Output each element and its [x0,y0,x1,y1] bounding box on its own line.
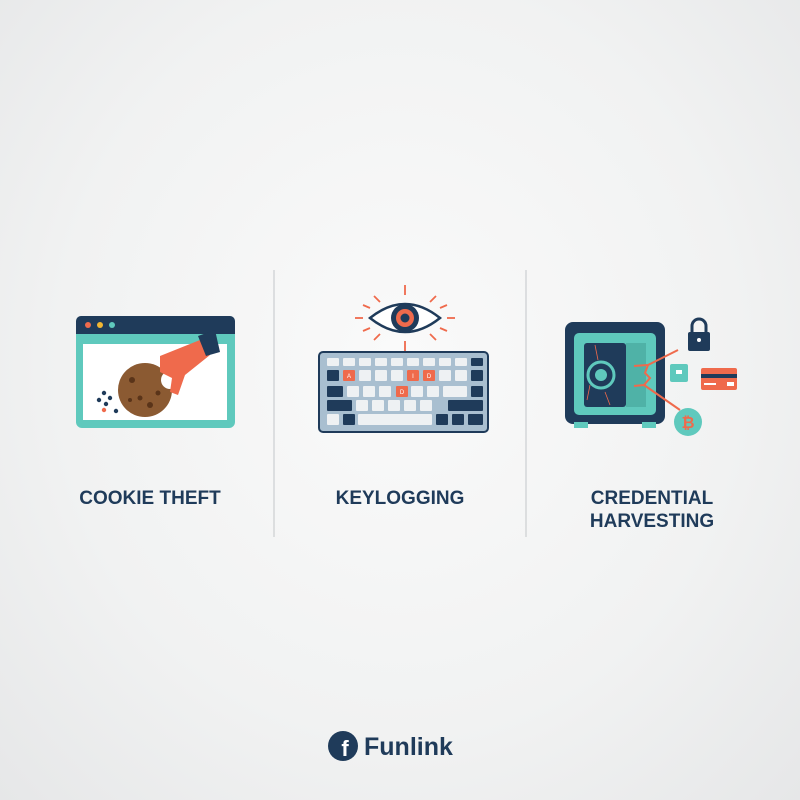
icon: safe with credentials [565,319,737,436]
icon: eye over keyboard: A [347,374,351,380]
logo: f [341,736,349,761]
icon: cookie theft browser [76,316,235,428]
icon: safe with credentials: ₿ [681,414,695,432]
heading: cookie theft: COOKIE THEFT [79,488,221,509]
icon: eye over keyboard: D [427,374,432,380]
logo [328,731,453,761]
icon: eye over keyboard: I [412,374,414,380]
heading: credential harvesting: CREDENTIAL [591,488,714,509]
logo: Funlink [364,733,453,761]
heading: keylogging: KEYLOGGING [336,488,464,509]
heading: credential harvesting: HARVESTING [590,511,714,532]
icon: eye over keyboard [319,285,488,432]
icon: eye over keyboard: D [400,390,405,396]
